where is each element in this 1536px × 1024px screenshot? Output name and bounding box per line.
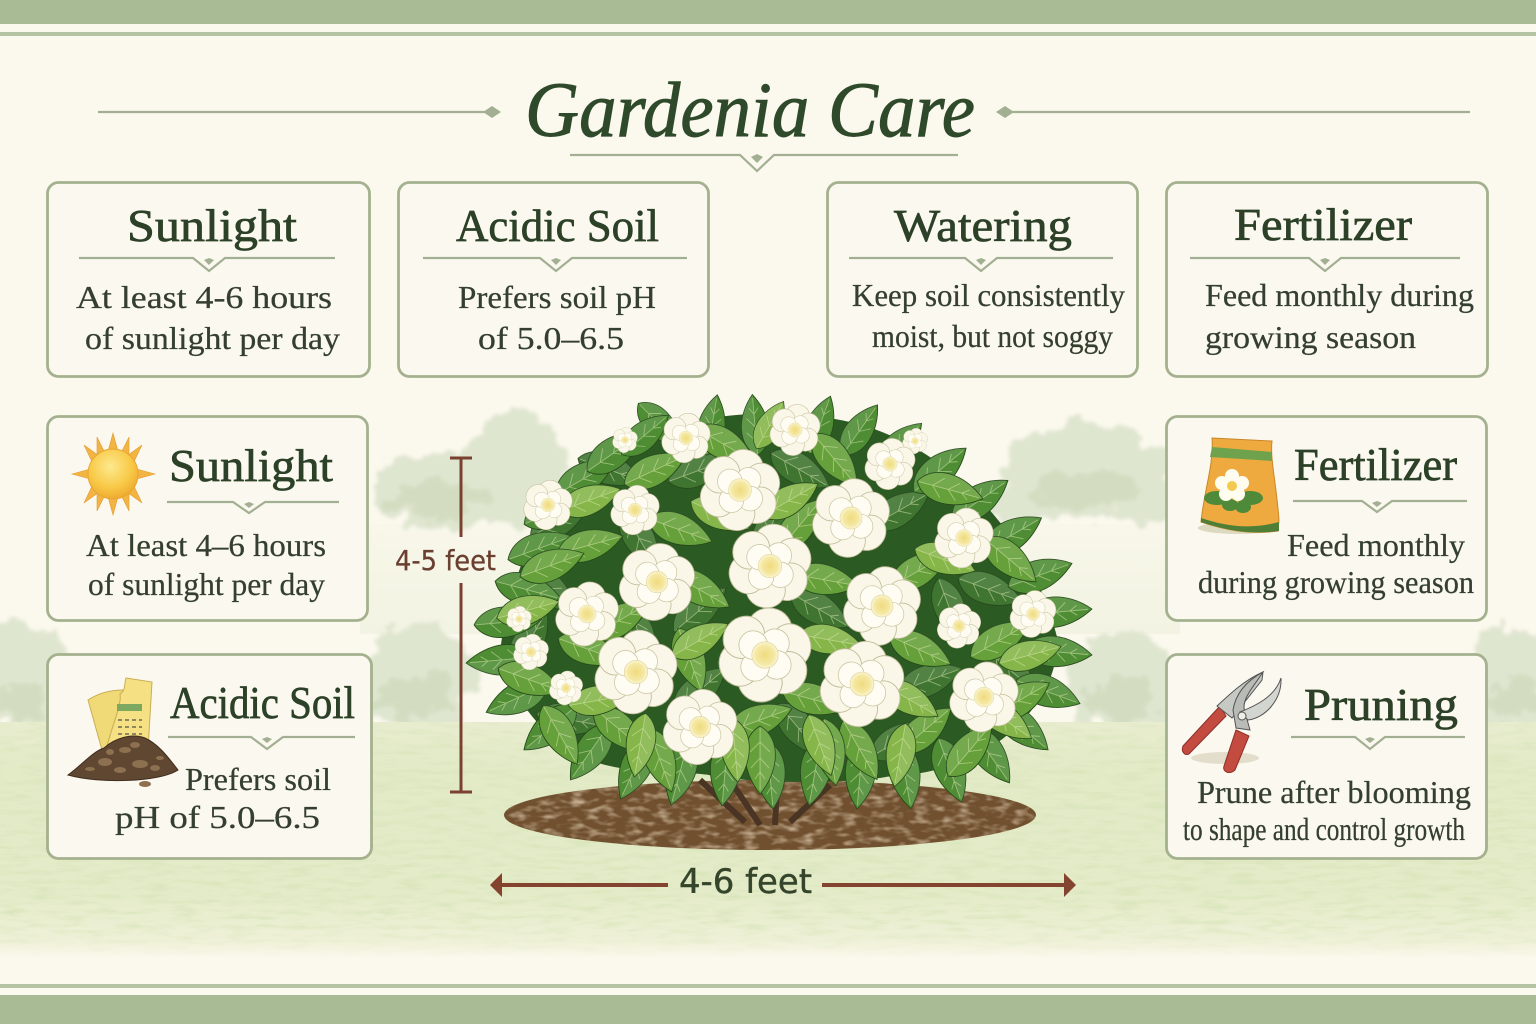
title: Gardenia Care xyxy=(525,66,975,153)
panel: fertilizer with icon xyxy=(1166,416,1486,620)
divider xyxy=(79,258,335,271)
icon: sun xyxy=(72,433,155,515)
body line 2: of 5.0–6.5 xyxy=(478,320,624,356)
body: Prefers soil pH xyxy=(458,279,656,315)
panel: watering top xyxy=(828,182,1138,376)
white gardenia flowers xyxy=(505,403,1059,767)
panel: acidic soil with icon xyxy=(48,654,372,858)
title underline xyxy=(570,154,958,171)
body: Feed monthly during xyxy=(1205,277,1474,313)
divider xyxy=(849,258,1113,271)
body line 2: to shape and control growth xyxy=(1183,811,1465,847)
heading: Acidic Soil xyxy=(170,677,355,728)
stems xyxy=(700,770,830,825)
panel: fertilizer top xyxy=(1166,182,1488,376)
body: At least 4-6 hours xyxy=(76,279,332,315)
mid hedge row xyxy=(0,618,1536,728)
lawn xyxy=(0,722,1536,958)
bush mass xyxy=(501,414,1057,782)
low wall xyxy=(360,524,1180,634)
body: At least 4–6 hours xyxy=(86,527,326,563)
width label: 4-6 feet xyxy=(679,862,812,902)
divider xyxy=(168,737,355,749)
panel: acidic soil top xyxy=(398,182,708,376)
body line 2: of sunlight per day xyxy=(88,566,325,602)
divider xyxy=(1190,258,1460,271)
body line 2: moist, but not soggy xyxy=(872,318,1113,354)
upper left hedge xyxy=(373,410,565,525)
body: Prefers soil xyxy=(185,761,331,797)
body: Prune after blooming xyxy=(1197,774,1471,810)
heading: Watering xyxy=(894,200,1072,251)
divider xyxy=(1293,501,1467,512)
width dimension arrow xyxy=(490,862,1076,902)
rim leaves xyxy=(465,392,1093,811)
lightest leaves xyxy=(493,395,1065,789)
body line 2: during growing season xyxy=(1198,564,1474,600)
panel: sunlight top xyxy=(48,182,370,376)
divider xyxy=(1291,737,1465,749)
icon: fertilizer bag xyxy=(1198,438,1279,534)
mulch bed xyxy=(504,780,1036,850)
height label: 4-5 feet xyxy=(395,544,496,577)
bottom border band xyxy=(0,984,1536,1024)
icon: soil test strips and soil pile xyxy=(68,678,178,787)
divider xyxy=(167,502,339,513)
hedge shading xyxy=(0,472,1536,720)
icon: pruning shears xyxy=(1182,672,1281,773)
title right ornament xyxy=(996,106,1470,118)
heading: Pruning xyxy=(1304,679,1458,730)
height dimension marker xyxy=(395,458,496,792)
upper right hedge xyxy=(980,422,1180,523)
misty garden backdrop xyxy=(0,410,1536,958)
heading: Sunlight xyxy=(127,200,297,251)
dark leaves xyxy=(500,440,1046,770)
divider xyxy=(423,258,687,271)
flowering gardenia bush xyxy=(465,392,1093,825)
heading: Acidic Soil xyxy=(456,200,659,251)
heading: Sunlight xyxy=(169,440,333,491)
heading: Fertilizer xyxy=(1234,199,1412,250)
body line 2: of sunlight per day xyxy=(85,320,340,356)
panel: pruning with icon xyxy=(1166,654,1486,858)
body: Keep soil consistently xyxy=(852,277,1125,313)
title left ornament xyxy=(98,106,501,118)
grass texture xyxy=(0,722,1536,958)
body line 2: pH of 5.0–6.5 xyxy=(115,799,320,835)
body: Feed monthly xyxy=(1287,527,1465,563)
top border band xyxy=(0,0,1536,36)
heading: Fertilizer xyxy=(1294,439,1457,490)
body line 2: growing season xyxy=(1205,319,1416,355)
bright leaves xyxy=(493,415,1057,797)
panel: sunlight with icon xyxy=(48,416,368,620)
